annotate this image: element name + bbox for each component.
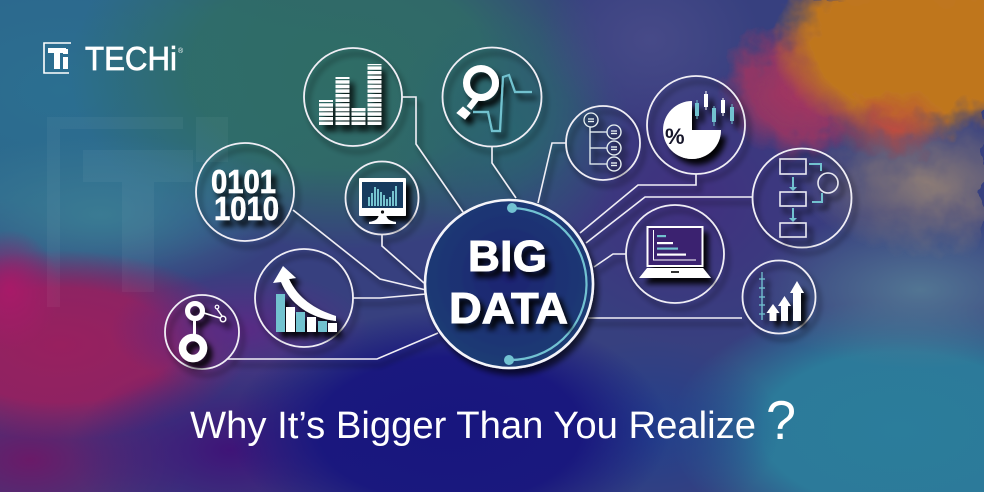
icon: magnifier with signal <box>457 68 532 131</box>
ring: bars <box>304 48 402 146</box>
connector: bars to core <box>402 97 463 212</box>
icon: rising arrows <box>759 272 804 321</box>
connector: laptop to core <box>594 254 626 267</box>
subtitle: Why It’s Bigger Than You Realize <box>190 405 756 447</box>
logo mark <box>44 43 71 73</box>
subtitle <box>190 389 796 451</box>
connector: flow to core <box>586 197 752 243</box>
logo: TECHi <box>44 40 184 77</box>
ring: rising chart <box>742 260 816 334</box>
question mark: ? <box>766 389 796 451</box>
ring: list <box>566 106 640 180</box>
background: faint pixel grid <box>47 117 228 307</box>
icon: binary digits: 1010 <box>214 190 279 227</box>
icon: monitor <box>359 178 406 224</box>
connector: list to core <box>538 143 566 203</box>
icon: growth arrow with bars <box>273 266 337 332</box>
icon: binary digits: 0101 <box>211 163 276 200</box>
icon: equalizer bars <box>326 64 374 125</box>
ring: laptop <box>626 205 724 303</box>
icon: flowchart <box>780 159 838 237</box>
icon: node graph <box>182 304 226 358</box>
connector: node graph to core <box>227 333 438 359</box>
core disc <box>425 200 593 368</box>
ring: flow <box>752 148 852 248</box>
connector lines and rings <box>165 48 852 369</box>
core heading <box>449 232 568 333</box>
ring: pie <box>647 76 745 174</box>
ring: magnifier <box>442 48 542 146</box>
icon: laptop <box>639 227 711 278</box>
connector: binary to core <box>293 210 426 290</box>
core circle: BIG DATA <box>425 200 593 368</box>
core teal arc <box>504 203 587 365</box>
core heading: BIG <box>468 232 547 281</box>
connector: chart to core <box>588 317 742 319</box>
ring: arrow chart <box>255 249 353 347</box>
icon: binary digits <box>211 163 279 227</box>
connector: monitor to core <box>382 235 424 283</box>
ring: monitor <box>346 162 418 234</box>
icon: pie chart with candlesticks: % <box>665 124 685 149</box>
ring: node graph <box>165 295 239 369</box>
connector: magnifier to core <box>492 146 516 198</box>
icon: hierarchy list <box>584 113 621 171</box>
registered mark: ® <box>178 47 184 55</box>
ring: binary <box>196 143 294 241</box>
icon: pie chart with candlesticks <box>663 91 734 159</box>
logo wordmark: TECHi <box>85 40 177 77</box>
connector: pie to core <box>580 174 696 233</box>
connector: arrow chart to core <box>353 294 426 298</box>
core heading: DATA <box>449 284 568 333</box>
